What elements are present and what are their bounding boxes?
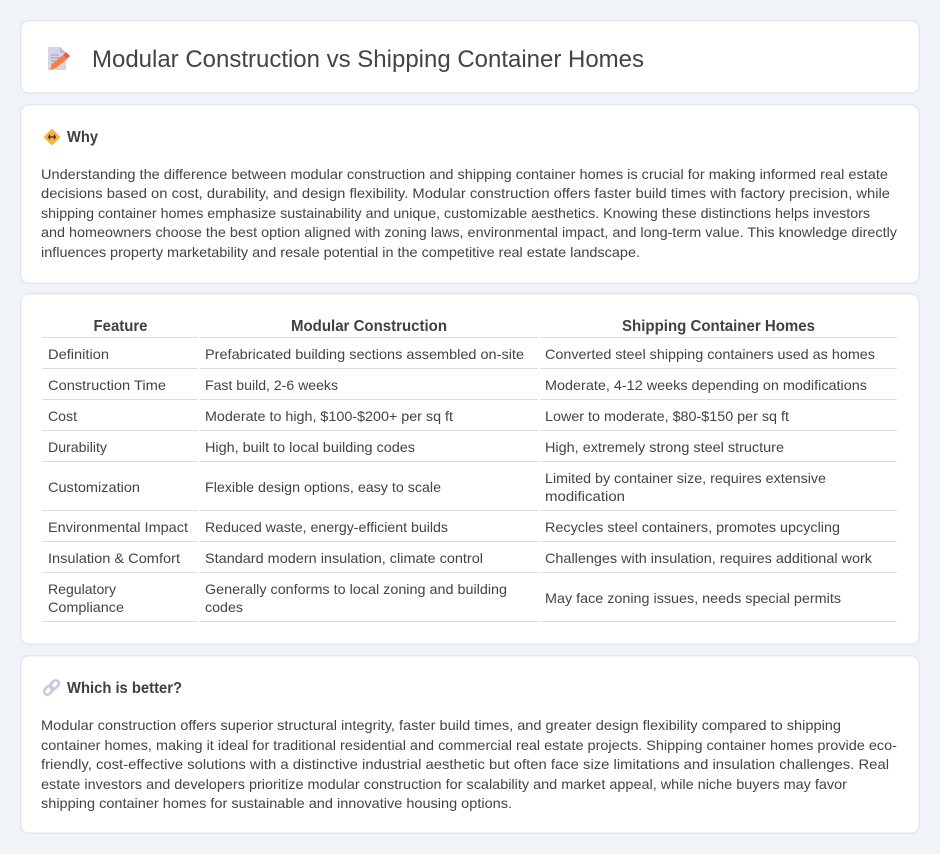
icon: chain link <box>43 679 60 696</box>
table header <box>94 318 815 335</box>
text block: which is better paragraph <box>41 717 897 811</box>
text block: which is better paragraph: friendly, cost-effective solutions with a distinctive industrial aesthetic but often face size limitations and insulation challenges. Real <box>41 756 889 772</box>
icon: diamond sign <box>44 130 60 144</box>
panel: why <box>21 105 919 283</box>
text block: why paragraph: and homeowners choose the best option aligned with zoning laws, environmental impact, and long-term value. This knowledge directly <box>41 224 897 240</box>
row: insulation and comfort: Insulation & Comfort <box>48 550 180 566</box>
row: definition: Definition <box>48 346 109 362</box>
row: insulation and comfort: Challenges with insulation, requires additional work <box>545 550 873 566</box>
text block: why paragraph: influences property marketability and resale potential in the competitive real estate landscape. <box>41 244 640 260</box>
heading: why: Why <box>67 129 98 146</box>
table header: Modular Construction <box>291 318 447 335</box>
row: definition <box>48 346 875 362</box>
row: durability <box>48 439 784 455</box>
row: insulation and comfort: Standard modern insulation, climate control <box>205 550 483 566</box>
row: customization <box>48 470 826 504</box>
icon: document with pencil <box>48 47 70 70</box>
row: regulatory compliance: May face zoning issues, needs special permits <box>545 590 841 606</box>
row: cost: Moderate to high, $100-$200+ per sq ft <box>205 408 453 424</box>
panel: comparison table <box>21 294 919 644</box>
row: cost: Lower to moderate, $80-$150 per sq ft <box>545 408 789 424</box>
row: regulatory compliance: codes <box>205 599 243 615</box>
row: environmental impact <box>48 519 840 535</box>
text block: why paragraph: Understanding the difference between modular construction and shipping container homes is crucial for making informed real estate <box>41 166 888 182</box>
row: durability: Durability <box>48 439 107 455</box>
row: cost: Cost <box>48 408 77 424</box>
row: customization: Limited by container size, requires extensive <box>545 470 826 486</box>
text block: which is better paragraph: shipping container homes for sustainable and innovative housing options. <box>41 795 512 811</box>
row: construction time: Fast build, 2-6 weeks <box>205 377 338 393</box>
row: customization: modification <box>545 488 625 504</box>
heading: which is better: Which is better? <box>67 680 182 697</box>
row: environmental impact: Recycles steel containers, promotes upcycling <box>545 519 840 535</box>
row: customization: Flexible design options, easy to scale <box>205 479 441 495</box>
row: durability: High, extremely strong steel structure <box>545 439 784 455</box>
row: environmental impact: Environmental Impact <box>48 519 188 535</box>
row: definition: Converted steel shipping containers used as homes <box>545 346 875 362</box>
text block: why paragraph: shipping container homes emphasize sustainability and unique, customizable aesthetics. Knowing these distinctions helps investors <box>41 205 870 221</box>
text block: which is better paragraph: estate investors and developers prioritize modular construction for scalability and market appeal, while niche buyers may favor <box>41 776 847 792</box>
row: customization: Customization <box>48 479 140 495</box>
text block: which is better paragraph: container homes, making it ideal for traditional residential and commercial real estate projects. Shipping container homes provide eco- <box>41 737 897 753</box>
panel: title header <box>21 21 919 93</box>
row: regulatory compliance <box>48 581 841 615</box>
table header: Shipping Container Homes <box>622 318 815 335</box>
row: cost <box>48 408 789 424</box>
row: definition: Prefabricated building sections assembled on-site <box>205 346 524 362</box>
text block: why paragraph <box>41 166 897 260</box>
row: regulatory compliance: Regulatory <box>48 581 116 597</box>
row: durability: High, built to local building codes <box>205 439 415 455</box>
table header: Feature <box>94 318 148 335</box>
text block: why paragraph: decisions based on cost, durability, and design flexibility. Modular construction offers faster build times with factory precision, while <box>41 185 890 201</box>
row: insulation and comfort <box>48 550 873 566</box>
text block: which is better paragraph: Modular construction offers superior structural integrity, faster build times, and greater design flexibility compared to shipping <box>41 717 841 733</box>
title: Modular Construction vs Shipping Container Homes <box>92 46 644 73</box>
panel: which is better <box>21 656 919 833</box>
row: construction time <box>48 377 867 393</box>
row: construction time: Moderate, 4-12 weeks depending on modifications <box>545 377 867 393</box>
row: regulatory compliance: Generally conforms to local zoning and building <box>205 581 507 597</box>
row: regulatory compliance: Compliance <box>48 599 124 615</box>
row: environmental impact: Reduced waste, energy-efficient builds <box>205 519 448 535</box>
row: construction time: Construction Time <box>48 377 166 393</box>
